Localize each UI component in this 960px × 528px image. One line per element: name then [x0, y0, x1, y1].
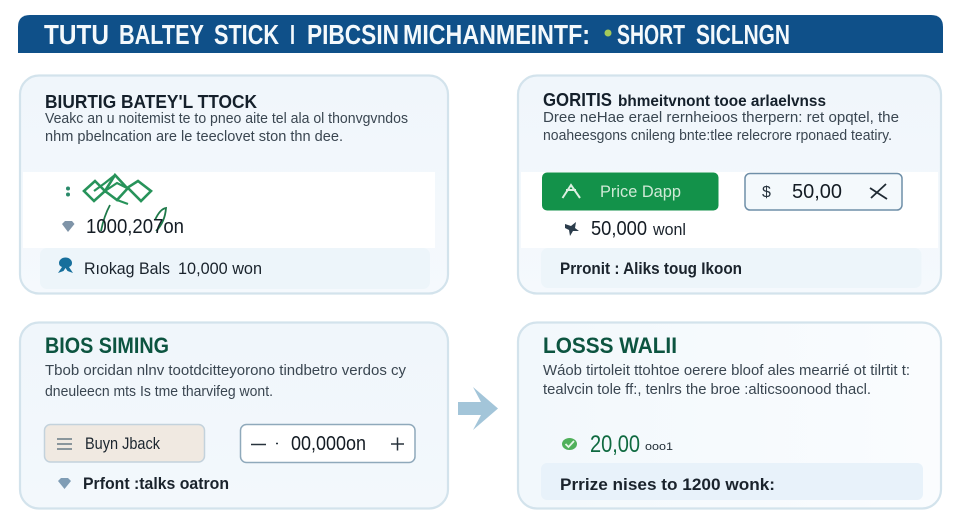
title banner: PIBCSIN — [307, 19, 399, 50]
heading: LOSSS WALII — [543, 333, 677, 358]
description: noaheesgons cnileng bnte:tlee relecrore rponaed teatiry. — [543, 127, 892, 144]
heading — [543, 90, 826, 110]
quantity box: 00,000on — [291, 433, 366, 455]
title banner: SHORT — [617, 19, 685, 50]
quantity box — [240, 424, 415, 462]
button: buy back — [44, 424, 204, 462]
info band — [541, 463, 923, 500]
heading: BIURTIG BATEY'L TTOCK — [45, 92, 257, 112]
description: nhm pbelncation are le teeclovet ston thn dee. — [45, 128, 343, 145]
description: Tbob orcidan nlnv tootdcitteyorono tindbetro verdos cy — [45, 362, 406, 379]
description: dneuleecn mts Is tme tharvifeg wont. — [45, 383, 273, 400]
info band: 10,000 won — [178, 260, 262, 278]
icon: green lattice chart — [66, 175, 166, 231]
info band — [40, 248, 430, 289]
button: buy back: Buyn Jback — [85, 434, 160, 453]
icon: green check — [562, 438, 577, 450]
description: Dree neHae erael rernheioos therpern: ret opqtel, the — [543, 109, 899, 126]
info band — [541, 248, 922, 288]
title banner: SICLNGN — [696, 19, 790, 50]
description: tealvcin tole ff:, tenlrs the broe :alticsoonood thacl. — [543, 381, 871, 398]
heading: GORITIS — [543, 90, 612, 110]
green button: price drop — [542, 172, 718, 210]
amount: 20,00 — [590, 431, 640, 458]
panel: loss warning — [518, 322, 941, 508]
description — [543, 109, 899, 144]
title banner: I — [290, 19, 295, 50]
title banner: BALTEY — [119, 19, 204, 50]
amount — [591, 218, 686, 240]
icon: list lines — [57, 439, 72, 449]
heading: bhmeitvnont tooe arlaelvnss — [618, 93, 826, 110]
value box — [745, 174, 902, 210]
amount: ooo1 — [645, 441, 673, 453]
heading: BIOS SIMING — [45, 333, 169, 358]
description — [45, 110, 408, 145]
info band: Prrize nises to 1200 wonk: — [560, 476, 775, 494]
green button: price drop: Price Dapp — [600, 182, 681, 201]
panel: buying battery stock — [20, 76, 448, 294]
description — [45, 362, 406, 400]
title banner: STICK — [214, 19, 279, 50]
title banner: TUTU — [44, 19, 109, 50]
panel: borrowing shares — [518, 76, 941, 294]
icon: cross — [870, 184, 887, 199]
info band: Prronit : Aliks toug Ikoon — [560, 260, 742, 278]
description — [543, 362, 910, 398]
icon: gem — [62, 221, 74, 232]
amount: 50,000 — [591, 218, 647, 240]
value box: 50,00 — [792, 181, 842, 203]
icon: chevron — [562, 185, 580, 198]
description: Veakc an u noitemist te to pneo aite tel ala ol thonvgvndos — [45, 110, 408, 127]
description: Wáob tirtoleit ttohtoe oerere bloof ales mearrié ot tilrtit t: — [543, 362, 910, 379]
title banner — [18, 15, 943, 53]
title banner: MICHANMEINTF: — [403, 19, 590, 50]
panel: short selling — [20, 322, 448, 508]
price value: 1000,207on — [86, 216, 184, 238]
icon: gem — [58, 478, 71, 489]
info band: Rıokag Bals — [84, 260, 170, 278]
arrow — [458, 387, 498, 430]
icon: star — [565, 222, 579, 236]
amount: wonl — [652, 221, 686, 239]
value box: $ — [762, 184, 771, 201]
icon: ribbon — [58, 258, 73, 273]
profit note: Prfont :talks oatron — [83, 475, 229, 493]
